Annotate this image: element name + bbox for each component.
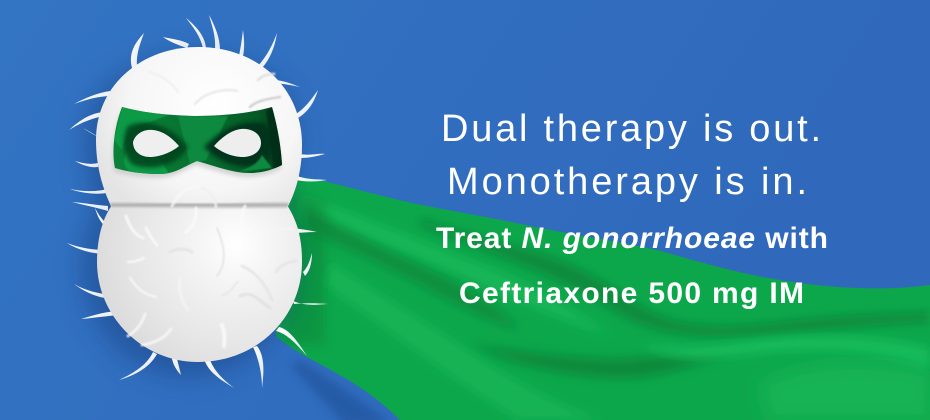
bacterium character [67,15,328,388]
body shadow [82,55,296,376]
headline text [441,108,821,203]
treatment text [436,222,828,310]
green cape [276,176,930,420]
cape fold: bright lower-left diagonal [330,270,574,418]
cape fold: upper dark band [420,218,930,337]
upper body lobe [96,47,302,208]
headline line 2: Monotherapy is in. [447,161,807,203]
cape shadow [290,360,392,420]
left eye opening [133,130,179,157]
cape fold: bright band across the right [640,336,930,370]
cilia around the body [67,15,328,388]
cape fold: dark diagonal [305,205,520,330]
lower body lobe [97,205,302,362]
faint cilia on the body [126,72,296,346]
treatment line 1: Treat N. gonorrhoeae with [436,222,828,255]
treatment line 2: Ceftriaxone 500 mg IM [459,277,804,310]
green hero mask [112,107,284,178]
cape fold: bright upper-left diagonal [322,206,588,324]
cape fold: shade beside body [285,190,325,345]
cape fold: lower dark band [482,346,714,381]
headline line 1: Dual therapy is out. [441,108,821,150]
right eye opening [214,129,261,157]
cape fold: bright lower-right swell [768,365,926,417]
body waist crease [110,201,289,209]
